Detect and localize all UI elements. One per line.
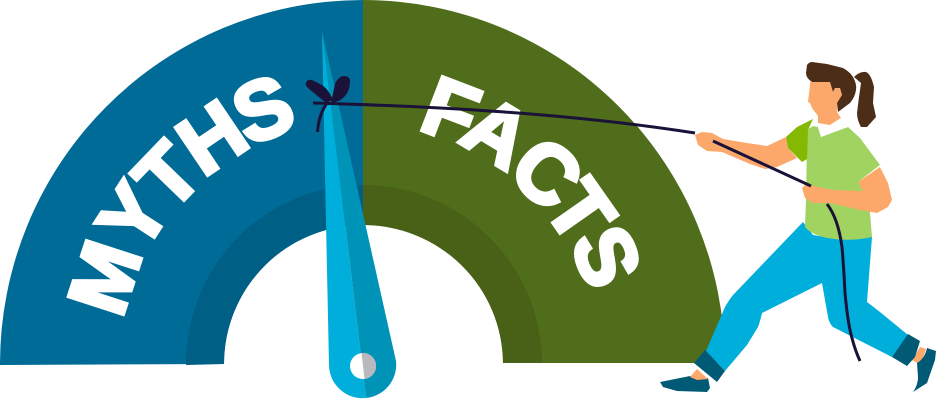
right ankle — [912, 347, 926, 363]
pants — [706, 222, 908, 371]
right cuff — [892, 334, 920, 366]
needle pivot — [350, 353, 376, 379]
collar — [808, 118, 848, 137]
person pulling rope — [660, 62, 936, 392]
gauge: facts half — [363, 0, 725, 363]
heading: MYTHS: MYTHS — [50, 56, 306, 325]
shirt — [805, 126, 880, 240]
sleeve — [786, 119, 813, 162]
right shoe — [913, 348, 936, 392]
gauge: myths half — [0, 0, 363, 365]
ponytail — [854, 72, 876, 127]
left ankle — [690, 369, 708, 380]
back arm — [802, 167, 892, 213]
left cuff — [694, 350, 725, 382]
rope — [313, 103, 860, 361]
hair — [806, 62, 856, 112]
left shoe — [660, 376, 710, 392]
knot bow — [306, 76, 350, 132]
gauge needle — [322, 31, 396, 398]
front arm — [695, 132, 797, 169]
face and neck — [808, 82, 842, 125]
heading: FACTS: FACTS — [411, 58, 660, 300]
